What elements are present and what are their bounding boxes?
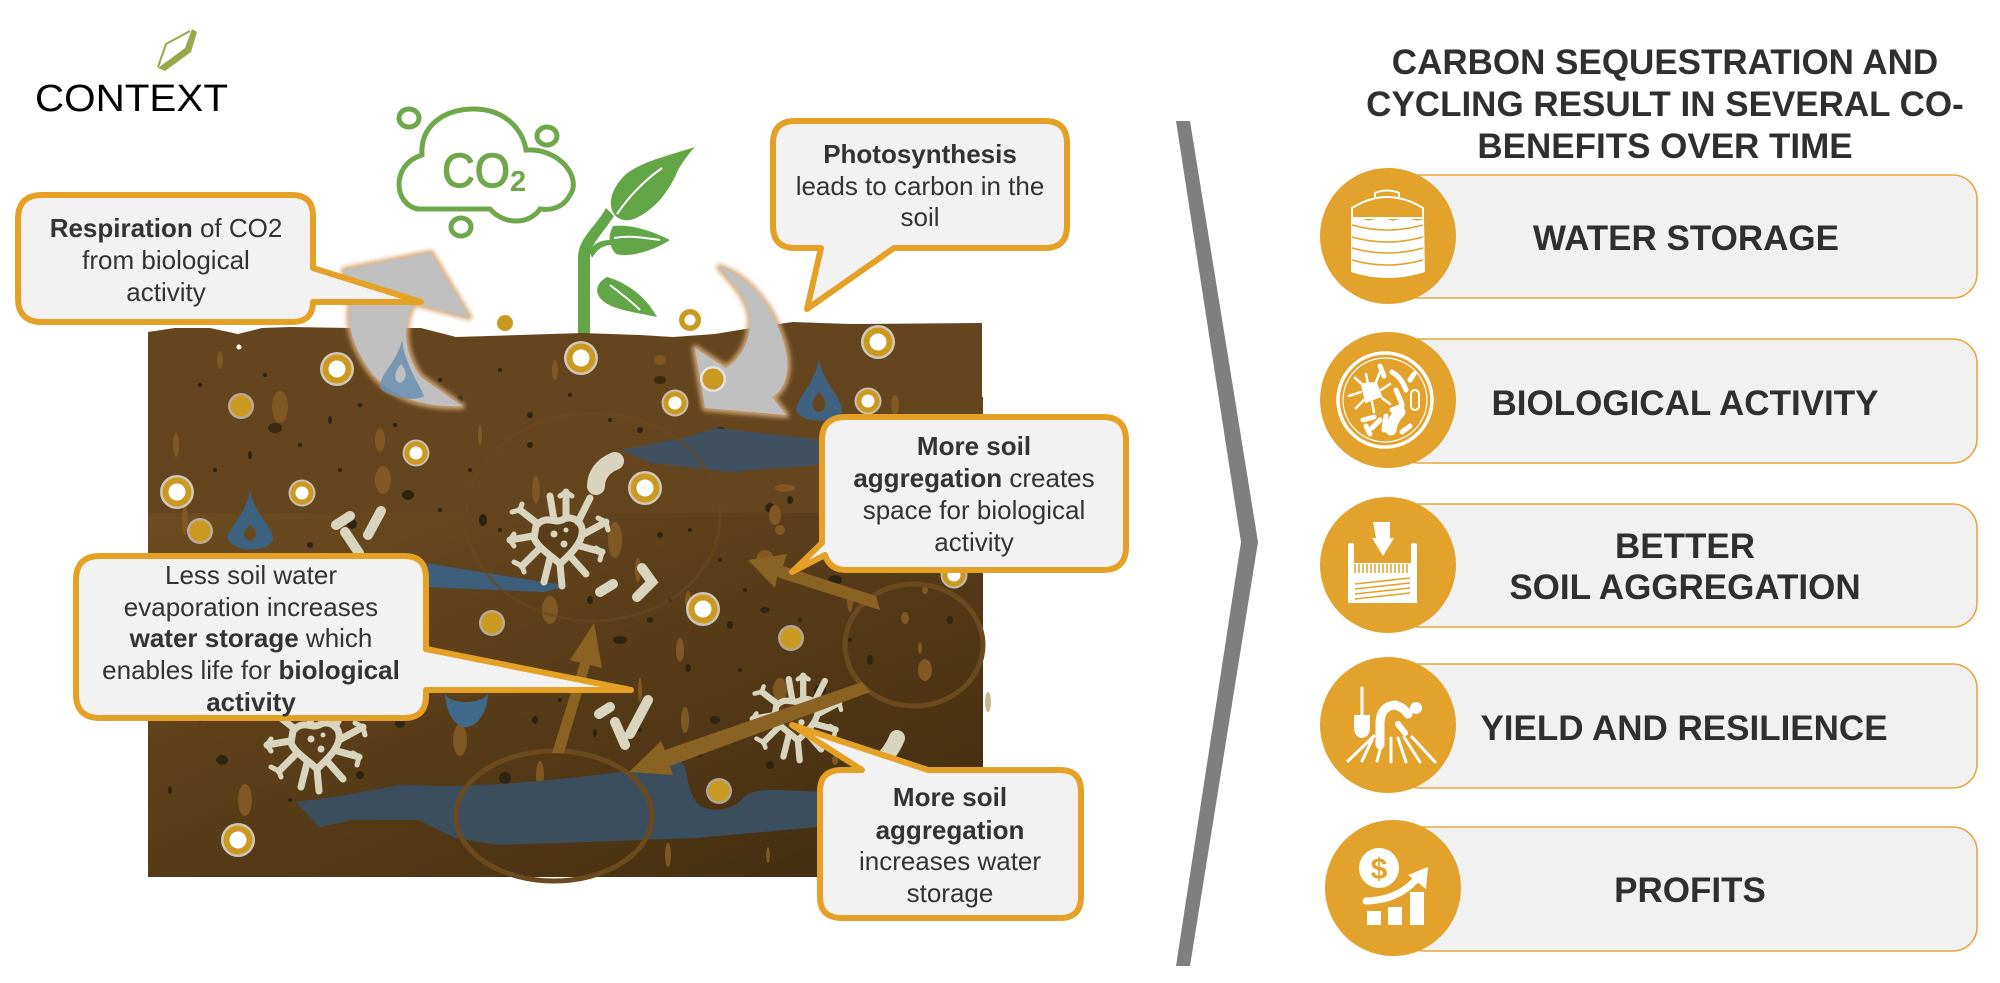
icon: CO2 cloud	[399, 109, 573, 236]
panel: yield and resilience	[1320, 657, 1977, 793]
microbes and bacteria	[267, 461, 897, 791]
panel: profits: PROFITS	[1614, 871, 1766, 910]
callout: photosynthesis: leads to carbon in the	[796, 171, 1044, 201]
panel: water storage: WATER STORAGE	[1533, 219, 1839, 258]
callout: respiration: activity	[126, 277, 206, 307]
panel: yield and resilience: YIELD AND RESILIENCE	[1480, 709, 1888, 748]
water bodies in soil	[296, 428, 840, 845]
heading	[1366, 43, 1964, 166]
icon: water tank	[1351, 190, 1425, 278]
callout: respiration: Respiration of CO2	[50, 213, 282, 243]
aggregation circles	[456, 413, 983, 881]
icon: CO2 cloud: CO	[442, 145, 510, 198]
callout: water storage: enables life for biological	[102, 655, 400, 685]
callout: respiration: from biological	[82, 245, 250, 275]
callout: water storage: Less soil water	[165, 560, 337, 590]
icon: money growth: $	[1371, 853, 1388, 886]
panel: better soil aggregation	[1320, 497, 1977, 633]
icon: money growth	[1359, 848, 1428, 925]
callout: photosynthesis: soil	[900, 202, 940, 232]
heading: BENEFITS OVER TIME	[1477, 127, 1853, 166]
callout: water storage	[76, 556, 631, 718]
heading: CARBON SEQUESTRATION AND	[1392, 43, 1938, 82]
callout: aggregation increases water: aggregation	[876, 815, 1024, 845]
panel: biological activity	[1320, 332, 1977, 468]
icon: petri dish	[1338, 353, 1432, 447]
icon: soil press	[1348, 522, 1417, 603]
panel: water storage	[1320, 168, 1977, 304]
callout: aggregation increases water: increases water	[859, 846, 1041, 876]
callout: aggregation creates space	[792, 417, 1126, 572]
callout: aggregation creates space: space for biological	[863, 495, 1085, 525]
icon: CO2 cloud: 2	[510, 166, 526, 198]
callout: aggregation creates space: activity	[934, 527, 1014, 557]
callout: aggregation increases water	[792, 725, 1081, 918]
callout: aggregation increases water: storage	[907, 878, 993, 908]
soil specks	[168, 351, 953, 867]
water droplets	[227, 358, 842, 727]
heading: CYCLING RESULT IN SEVERAL CO-	[1366, 85, 1964, 124]
nutrient dots	[160, 309, 968, 857]
panel: better soil aggregation: SOIL AGGREGATION	[1509, 568, 1861, 607]
callout: aggregation increases water: More soil	[893, 782, 1007, 812]
callout: respiration	[18, 195, 421, 322]
callout: water storage: evaporation increases	[124, 592, 378, 622]
callout: water storage: activity	[206, 687, 296, 717]
gray arrow: photosynthesis down	[695, 267, 787, 415]
logo: CONTEXT	[35, 29, 228, 120]
icon: farmer	[1348, 688, 1435, 762]
callout: aggregation creates space: aggregation creates	[853, 463, 1095, 493]
panel: profits	[1325, 820, 1977, 956]
callout: photosynthesis: Photosynthesis	[823, 139, 1017, 169]
callout: photosynthesis	[773, 121, 1067, 309]
soil cross-section	[148, 322, 991, 877]
callout: water storage: water storage which	[129, 623, 372, 653]
chevron divider	[1176, 121, 1258, 966]
panel: better soil aggregation: BETTER	[1615, 527, 1755, 566]
brown flow arrows	[552, 554, 880, 775]
logo: CONTEXT: CONTEXT	[35, 78, 228, 120]
icon: seedling	[578, 147, 695, 334]
gray arrow: respiration up	[344, 253, 469, 406]
panel: biological activity: BIOLOGICAL ACTIVITY	[1492, 384, 1878, 423]
callout: aggregation creates space: More soil	[917, 431, 1031, 461]
